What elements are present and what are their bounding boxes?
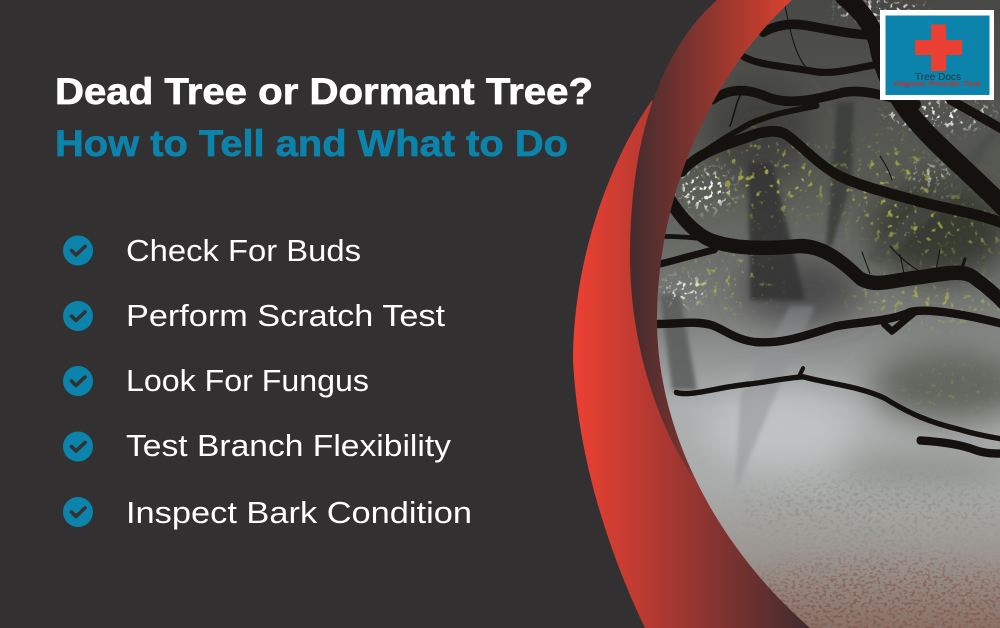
inner dark red crescent: [630, 0, 800, 476]
item: test branch flexibility: Test Branch Flexibility: [126, 428, 452, 463]
ground plants: [744, 474, 1000, 543]
item: check for buds: Check For Buds: [126, 233, 361, 268]
checklist: [63, 233, 472, 530]
forest floor leaves: [758, 545, 1000, 628]
logo tagline: Diagnose. Prescribe. Treat.: [894, 81, 982, 88]
logo: [880, 10, 994, 100]
subtitle: How to Tell and What to Do: [55, 123, 568, 164]
title: [55, 71, 593, 164]
misty trunks: [660, 102, 1000, 492]
logo name: Tree Docs: [915, 72, 961, 83]
item: look for fungus: Look For Fungus: [126, 363, 369, 398]
item: inspect bark condition: Inspect Bark Condition: [126, 495, 472, 530]
foliage speckles: [674, 124, 1000, 405]
logo cross icon: [915, 24, 962, 71]
title: Dead Tree or Dormant Tree?: [55, 71, 593, 112]
item: perform scratch test: Perform Scratch Test: [126, 298, 445, 333]
forest photograph: [650, 0, 1000, 628]
outer red swoosh: [573, 100, 812, 628]
canopy light gaps: [659, 0, 1000, 310]
black branches: [658, 0, 1000, 454]
